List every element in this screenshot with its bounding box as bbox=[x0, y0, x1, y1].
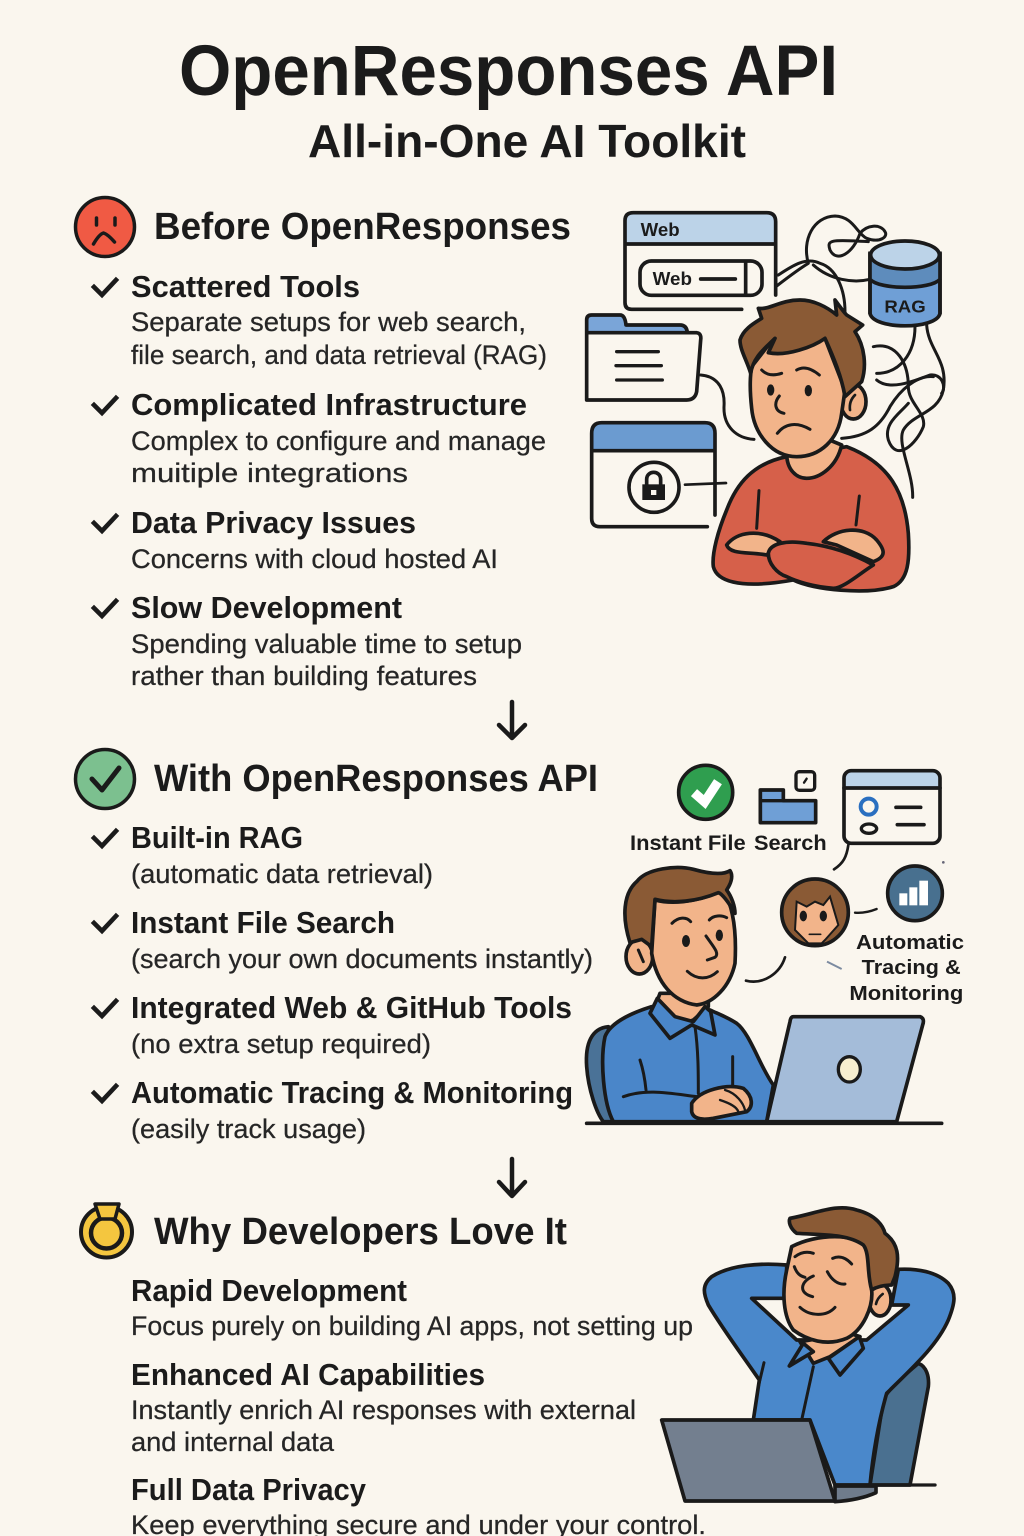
heading: before: Before OpenResponses bbox=[154, 206, 571, 248]
icon: avatar bbox=[782, 879, 848, 946]
item: complicated infrastructure: Complex to configure and manage bbox=[131, 426, 546, 456]
item: enhanced AI capabilities: Instantly enrich AI responses with external bbox=[131, 1395, 636, 1425]
frustrated person bbox=[713, 300, 909, 591]
item: enhanced AI capabilities: and internal data bbox=[131, 1427, 334, 1457]
item: automatic tracing and monitoring bbox=[94, 1075, 573, 1144]
tangled cables bbox=[777, 216, 944, 497]
item: slow development: Spending valuable time to setup bbox=[131, 629, 522, 659]
folder bbox=[587, 315, 754, 439]
item: scattered tools: Separate setups for web search, bbox=[131, 307, 526, 337]
RAG database: RAG bbox=[884, 297, 926, 317]
arrow: with to why bbox=[499, 1159, 525, 1196]
laptop bbox=[662, 1420, 935, 1502]
icon: medal bbox=[81, 1204, 132, 1258]
icon: sad face bbox=[76, 198, 134, 256]
item: full data privacy: Full Data Privacy bbox=[131, 1472, 367, 1507]
icon: app window bbox=[834, 771, 940, 869]
item: data privacy issues: Concerns with cloud hosted AI bbox=[131, 544, 498, 574]
label: instant file search: Search bbox=[754, 831, 827, 855]
item: complicated infrastructure bbox=[94, 387, 546, 488]
title: OpenResponses API bbox=[179, 32, 838, 111]
item: slow development bbox=[94, 590, 522, 691]
chair bbox=[870, 1363, 929, 1485]
label: automatic tracing and monitoring: Monitoring bbox=[849, 982, 963, 1005]
label: instant file search bbox=[630, 831, 827, 855]
item: scattered tools: Scattered Tools bbox=[131, 269, 360, 304]
item: built-in RAG: Built-in RAG bbox=[131, 820, 303, 855]
item: instant file search: (search your own documents instantly) bbox=[131, 944, 593, 974]
arrow: before to with bbox=[499, 702, 525, 738]
lock window bbox=[592, 423, 726, 527]
item: automatic tracing and monitoring: (easily track usage) bbox=[131, 1114, 366, 1144]
illustration: frustrated developer with scattered tools bbox=[587, 213, 944, 591]
illustration: relaxed developer bbox=[662, 1208, 954, 1502]
item: slow development: rather than building features bbox=[131, 661, 477, 691]
person at laptop bbox=[586, 868, 942, 1123]
web window: Web bbox=[641, 219, 680, 240]
illustration: happy developer with integrated tools bbox=[586, 765, 964, 1123]
item: enhanced AI capabilities bbox=[131, 1357, 636, 1457]
subtitle: All-in-One AI Toolkit bbox=[308, 115, 746, 167]
item: rapid development: Focus purely on building AI apps, not setting up bbox=[131, 1311, 693, 1341]
icon: green check bbox=[76, 750, 134, 808]
item: integrated web and github tools: Integrated Web & GitHub Tools bbox=[131, 990, 572, 1025]
item: data privacy issues: Data Privacy Issues bbox=[131, 505, 416, 540]
item: automatic tracing and monitoring: Automatic Tracing & Monitoring bbox=[131, 1075, 573, 1110]
icon: green check badge bbox=[679, 765, 733, 819]
item: rapid development bbox=[131, 1273, 693, 1341]
heading: with: With OpenResponses API bbox=[154, 758, 598, 800]
item: instant file search bbox=[94, 905, 593, 974]
item: integrated web and github tools: (no extra setup required) bbox=[131, 1029, 431, 1059]
label: instant file search: Instant File bbox=[630, 831, 746, 855]
item: complicated infrastructure: Complicated Infrastructure bbox=[131, 387, 527, 422]
web window: Web bbox=[653, 268, 692, 289]
item: instant file search: Instant File Search bbox=[131, 905, 395, 940]
heading: why: Why Developers Love It bbox=[154, 1211, 567, 1253]
item: complicated infrastructure: muitiple integrations bbox=[131, 458, 408, 488]
item: scattered tools bbox=[94, 269, 547, 370]
item: scattered tools: file search, and data retrieval (RAG) bbox=[131, 340, 547, 370]
icon: monitoring chart bbox=[827, 861, 945, 969]
item: slow development: Slow Development bbox=[131, 590, 402, 625]
relaxed person bbox=[704, 1208, 954, 1485]
panel: before OpenResponses bbox=[76, 198, 571, 691]
RAG database bbox=[870, 241, 940, 326]
label: automatic tracing and monitoring bbox=[849, 931, 964, 1005]
panel: with OpenResponses API bbox=[76, 750, 598, 1144]
item: built-in RAG bbox=[94, 820, 433, 889]
web window bbox=[625, 213, 776, 309]
icon: file search folder bbox=[760, 772, 816, 823]
item: rapid development: Rapid Development bbox=[131, 1273, 407, 1308]
item: full data privacy bbox=[131, 1472, 706, 1536]
item: integrated web and github tools bbox=[94, 990, 572, 1059]
panel: why developers love it bbox=[81, 1204, 706, 1536]
label: automatic tracing and monitoring: Tracing & bbox=[862, 956, 961, 979]
item: built-in RAG: (automatic data retrieval) bbox=[131, 859, 433, 889]
item: data privacy issues bbox=[94, 505, 498, 574]
item: enhanced AI capabilities: Enhanced AI Capabilities bbox=[131, 1357, 485, 1392]
label: automatic tracing and monitoring: Automatic bbox=[856, 931, 964, 954]
